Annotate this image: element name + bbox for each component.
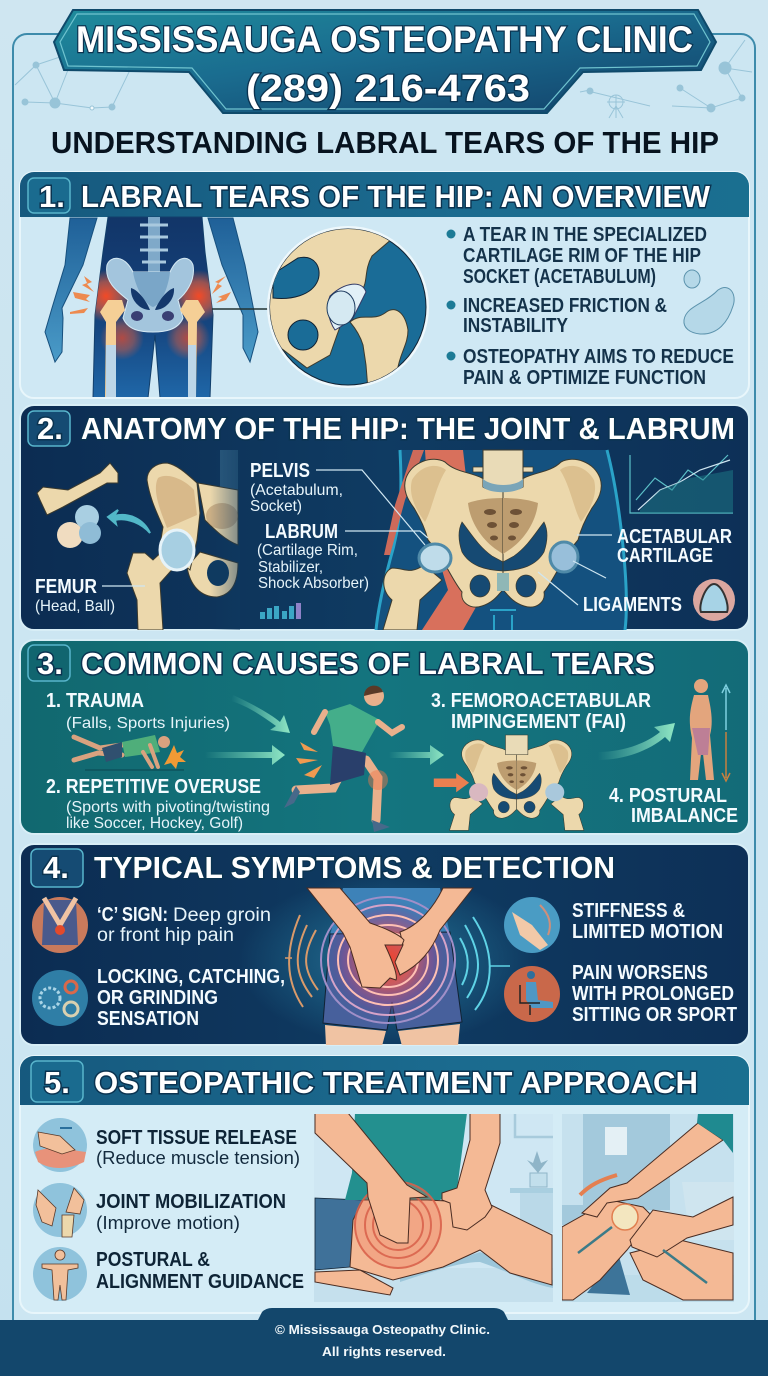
symptom text left: OR GRINDING <box>97 987 218 1009</box>
symptom text left: LOCKING, CATCHING, <box>97 966 285 988</box>
illustration: ball pieces <box>57 505 101 548</box>
icon: gears <box>32 970 88 1026</box>
label: acetabular cartilage <box>617 526 732 567</box>
treatment labels: (Reduce muscle tension) <box>96 1148 300 1168</box>
symptom text right: LIMITED MOTION <box>572 921 723 943</box>
panel 5 header band <box>20 1056 749 1105</box>
cause labels: like Soccer, Hockey, Golf) <box>66 815 243 832</box>
badge 2: 2. <box>37 411 63 446</box>
treatment labels: JOINT MOBILIZATION <box>96 1191 286 1213</box>
cause labels: (Sports with pivoting/twisting <box>66 799 270 816</box>
phone number: (289) 216-4763 <box>246 68 530 110</box>
label: femur: (Head, Ball) <box>35 598 115 615</box>
badge 4: 4. <box>43 850 69 885</box>
treatment labels: ALIGNMENT GUIDANCE <box>96 1271 304 1293</box>
pain waves left <box>285 915 318 1007</box>
treatment labels: SOFT TISSUE RELEASE <box>96 1127 297 1149</box>
copyright text: © Mississauga Osteopathy Clinic. <box>275 1322 490 1337</box>
label: labrum: Stabilizer, <box>258 559 323 576</box>
cause labels: (Falls, Sports Injuries) <box>66 715 230 732</box>
runner <box>284 686 402 832</box>
panel 3 title: COMMON CAUSES OF LABRAL TEARS <box>81 646 655 681</box>
main heading: UNDERSTANDING LABRAL TEARS OF THE HIP <box>51 125 719 160</box>
rights text: All rights reserved. <box>322 1344 446 1359</box>
badge 2 <box>28 411 70 446</box>
FAI pelvis <box>434 735 584 830</box>
symptom text right: PAIN WORSENS <box>572 962 708 984</box>
badge 5: 5. <box>44 1065 70 1100</box>
pain bolts <box>70 276 231 314</box>
icon: stiffness <box>504 897 560 953</box>
leader line to zoom circle <box>212 308 270 310</box>
panel 1 bullets: OSTEOPATHY AIMS TO REDUCE <box>463 346 734 368</box>
central figure: groin pain <box>258 887 518 1045</box>
label: pelvis: Socket) <box>250 498 302 515</box>
callout leader lines <box>102 470 612 605</box>
panel 1 bullets: SOCKET (ACETABULUM) <box>463 266 656 288</box>
treatment labels: POSTURAL & <box>96 1249 210 1271</box>
arrows between causes <box>205 695 675 765</box>
cause labels: 3. FEMOROACETABULAR <box>431 690 651 712</box>
footer bar <box>0 1308 768 1376</box>
network pattern right <box>580 40 752 118</box>
cause labels: IMBALANCE <box>631 805 738 827</box>
hip joint zoom circle <box>262 222 429 390</box>
symptom text right: STIFFNESS & <box>572 900 685 922</box>
cause labels <box>46 690 738 832</box>
panel 1 bullets: A TEAR IN THE SPECIALIZED <box>463 224 707 246</box>
illustration: massage on hip <box>314 1113 553 1302</box>
pain waves right <box>460 917 510 1010</box>
panel 5: treatment <box>20 1056 749 1313</box>
label: labrum: (Cartilage Rim, <box>257 542 358 559</box>
panel 3: causes <box>20 640 749 834</box>
label: pelvis: PELVIS <box>250 460 310 482</box>
label: labrum: Shock Absorber) <box>258 575 369 592</box>
badge 1 <box>28 178 70 214</box>
muscle and body outline right <box>376 450 626 630</box>
banner with clinic name and phone <box>54 10 716 113</box>
icon: C sign <box>32 897 88 953</box>
badge 4 <box>31 849 83 887</box>
badge 3: 3. <box>37 646 63 681</box>
label: femur <box>35 576 115 615</box>
label: labrum: LABRUM <box>265 521 338 543</box>
anatomical body figure with hip pain <box>45 217 258 398</box>
treatment labels <box>96 1127 304 1293</box>
label: acetabular cartilage: ACETABULAR <box>617 526 732 548</box>
panel 1 bullets: CARTILAGE RIM OF THE HIP <box>463 245 701 267</box>
panel 1 header band <box>20 172 749 217</box>
icon: labrum cartilage <box>684 270 734 334</box>
pelvis skeleton <box>383 450 601 630</box>
badge 3 <box>28 645 70 681</box>
icon: posture <box>33 1247 87 1301</box>
label: pelvis <box>250 460 343 515</box>
panel 2: anatomy <box>20 405 749 630</box>
icon: joint mobilization <box>33 1183 87 1237</box>
panel 4 title: TYPICAL SYMPTOMS & DETECTION <box>94 850 615 885</box>
label: acetabular cartilage: CARTILAGE <box>617 545 713 567</box>
label: femur: FEMUR <box>35 576 97 598</box>
posture arrows <box>722 685 730 730</box>
mini line chart <box>630 455 733 513</box>
label: ligaments: LIGAMENTS <box>583 594 682 616</box>
treatment labels: (Improve motion) <box>96 1213 240 1233</box>
falling person <box>74 735 186 770</box>
panel 5 title: OSTEOPATHIC TREATMENT APPROACH <box>94 1065 698 1100</box>
network pattern left <box>15 52 130 110</box>
symptom text left: SENSATION <box>97 1008 199 1030</box>
panel 2 title: ANATOMY OF THE HIP: THE JOINT & LABRUM <box>81 411 735 446</box>
posture figure <box>690 679 730 780</box>
mini bar chart <box>260 603 301 619</box>
symptom text right <box>572 900 737 1026</box>
panel 1: overview <box>20 172 749 398</box>
panel 1 title: LABRAL TEARS OF THE HIP: AN OVERVIEW <box>81 179 711 214</box>
symptom text left: Deep groin <box>173 905 271 926</box>
label: labrum <box>257 521 369 592</box>
panel 4: symptoms <box>20 844 749 1046</box>
illustration: knee mobilization <box>562 1113 734 1302</box>
cause labels: 2. REPETITIVE OVERUSE <box>46 776 261 798</box>
panel 1 bullets <box>446 224 734 389</box>
symptom text right: SITTING OR SPORT <box>572 1004 737 1026</box>
labrum inset icon <box>693 579 735 621</box>
icon: soft tissue <box>33 1118 87 1172</box>
icon: sitting <box>504 966 560 1022</box>
badge 1: 1. <box>39 179 65 214</box>
panel 1 bullets: INSTABILITY <box>463 315 569 337</box>
panel 1 bullets: INCREASED FRICTION & <box>463 295 667 317</box>
illustration: side hip bone <box>127 450 240 630</box>
cause labels: 4. POSTURAL <box>609 785 727 807</box>
posture down arrow <box>722 732 730 781</box>
symptom text left: or front hip pain <box>97 925 234 946</box>
symptom text right: WITH PROLONGED <box>572 983 734 1005</box>
illustration: femur bone <box>37 463 118 515</box>
label: pelvis: (Acetabulum, <box>250 482 343 499</box>
badge 5 <box>31 1061 83 1102</box>
cause labels: IMPINGEMENT (FAI) <box>451 711 626 733</box>
clinic name: MISSISSAUGA OSTEOPATHY CLINIC <box>76 19 693 60</box>
cause labels: 1. TRAUMA <box>46 690 144 712</box>
symptom text left: ‘C’ SIGN: <box>97 904 168 926</box>
panel 1 bullets: PAIN & OPTIMIZE FUNCTION <box>463 367 706 389</box>
arrow to ball <box>108 510 150 533</box>
symptom text left <box>97 904 285 1030</box>
